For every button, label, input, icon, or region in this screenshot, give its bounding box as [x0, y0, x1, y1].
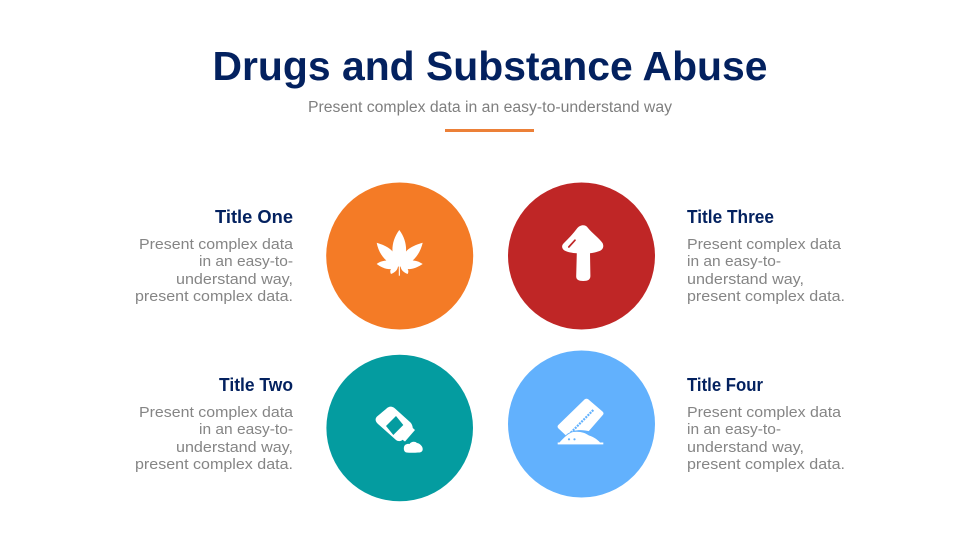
title: Drugs and Substance Abuse	[212, 43, 768, 89]
panel: title one text	[135, 207, 294, 305]
panel: title three text: Present complex data	[687, 237, 842, 253]
panel: title four text: understand way,	[687, 440, 804, 456]
panel: title four text: in an easy-to-	[687, 422, 781, 438]
red circle	[508, 182, 655, 330]
panel: title four text: present complex data.	[687, 457, 845, 473]
panel: title two text: Title Two	[219, 375, 293, 395]
panel: title two text	[135, 375, 294, 473]
panel: title three text	[687, 207, 845, 305]
panel: title four text	[687, 375, 845, 473]
subtitle: Present complex data in an easy-to-understand way	[308, 99, 672, 116]
panel: title two text: in an easy-to-	[199, 422, 293, 438]
panel: title four text: Present complex data	[687, 405, 842, 421]
panel: title one text: present complex data.	[135, 289, 293, 305]
orange circle	[326, 182, 473, 330]
panel: title one text: understand way,	[176, 272, 293, 288]
icon: mushroom	[562, 225, 603, 281]
icon: razor blade and powder	[556, 399, 606, 446]
panel: title one text: Title One	[215, 207, 293, 227]
panel: title one text: Present complex data	[139, 237, 294, 253]
panel: title three text: understand way,	[687, 272, 804, 288]
panel: title three text: Title Three	[687, 207, 774, 227]
panel: title three text: present complex data.	[687, 289, 845, 305]
accent line	[445, 129, 534, 132]
panel: title two text: present complex data.	[135, 457, 293, 473]
blue circle	[508, 350, 655, 498]
panel: title two text: understand way,	[176, 440, 293, 456]
teal circle	[326, 355, 473, 501]
panel: title four text: Title Four	[687, 375, 763, 395]
icon: pill bottle	[376, 407, 423, 453]
panel: title two text: Present complex data	[139, 405, 294, 421]
panel: title one text: in an easy-to-	[199, 254, 293, 270]
icon: cannabis leaf	[377, 230, 423, 276]
panel: title three text: in an easy-to-	[687, 254, 781, 270]
